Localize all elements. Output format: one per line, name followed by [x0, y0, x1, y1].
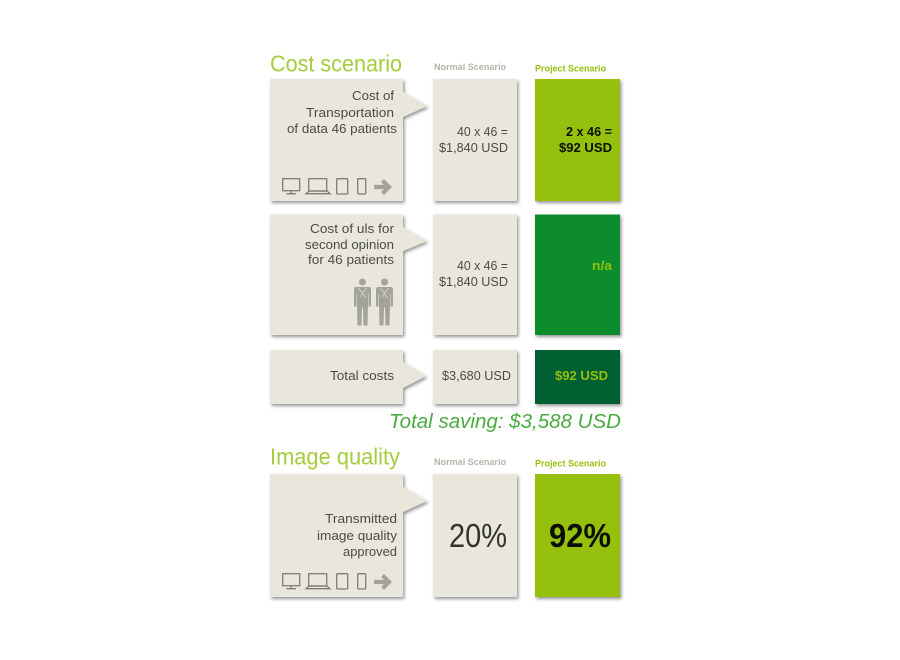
- callout: second opinion cost: for 46 patients: [308, 252, 395, 267]
- panel: normal scenario total: $3,680 USD: [442, 368, 511, 383]
- callout: transportation cost: [270, 79, 427, 201]
- label: project scenario, quality section: Project Scenario: [535, 458, 606, 468]
- panel: normal scenario transportation cost: 40 x 46 =: [457, 124, 508, 139]
- panel: project scenario second opinion n/a: n/a: [592, 258, 613, 273]
- label: normal scenario, cost section: Normal Scenario: [434, 62, 506, 72]
- callout: second opinion cost: [270, 214, 427, 335]
- panel: project scenario transportation cost: 2 x 46 =: [566, 124, 612, 139]
- total saving: Total saving: $3,588 USD: [389, 411, 621, 433]
- panel: normal scenario quality: [433, 474, 517, 597]
- panel: project scenario total: $92 USD: [555, 368, 608, 383]
- heading: image quality: Image quality: [270, 444, 400, 470]
- callout: transmitted image quality: image quality: [317, 528, 398, 543]
- label: project scenario, cost section: Project Scenario: [535, 64, 606, 74]
- panel: project scenario second opinion n/a: [535, 214, 620, 335]
- callout: transmitted image quality: approved: [343, 544, 397, 559]
- icon: devices and arrow: [283, 574, 389, 589]
- callout: total costs: Total costs: [330, 368, 395, 383]
- panel: normal scenario second opinion cost: $1,840 USD: [439, 274, 508, 289]
- panel: project scenario quality: 92%: [549, 517, 611, 554]
- panel: normal scenario transportation cost: $1,840 USD: [439, 140, 508, 155]
- icon: devices and arrow: [283, 179, 389, 194]
- callout: total costs: [270, 350, 426, 404]
- callout: second opinion cost: Cost of uls for: [310, 221, 395, 236]
- panel: project scenario total: [535, 350, 620, 404]
- label: normal scenario, quality section: Normal Scenario: [434, 457, 506, 467]
- callout: transmitted image quality: Transmitted: [325, 511, 397, 526]
- callout: transportation cost: Cost of: [352, 88, 394, 103]
- callout: transmitted image quality: [270, 474, 427, 597]
- icon: two doctors: [354, 278, 393, 326]
- heading: cost scenario: Cost scenario: [270, 50, 402, 76]
- callout: transportation cost: Transportation: [306, 105, 394, 120]
- panel: normal scenario second opinion cost: 40 x 46 =: [457, 258, 508, 273]
- panel: project scenario transportation cost: [535, 79, 620, 201]
- panel: normal scenario transportation cost: [433, 79, 517, 201]
- panel: normal scenario quality: 20%: [449, 517, 507, 554]
- panel: project scenario quality: [535, 474, 620, 597]
- callout: second opinion cost: second opinion: [305, 237, 394, 252]
- panel: project scenario transportation cost: $92 USD: [559, 140, 612, 155]
- callout: transportation cost: of data 46 patients: [287, 121, 398, 136]
- panel: normal scenario total: [433, 350, 517, 404]
- panel: normal scenario second opinion cost: [433, 214, 517, 335]
